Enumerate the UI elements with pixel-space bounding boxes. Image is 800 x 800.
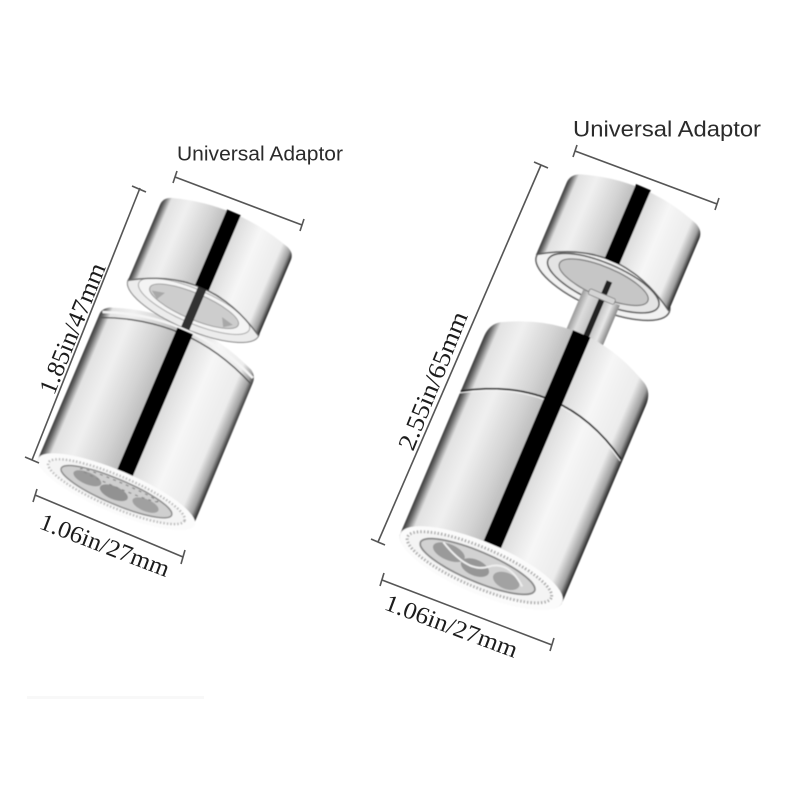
upper adaptor cap: [119, 185, 299, 356]
dimension line: right base width: [380, 573, 554, 651]
stem: [565, 290, 620, 348]
label: left height: 1.85in/47mm: [35, 259, 112, 398]
lower body rim over underside: [102, 297, 260, 378]
label: right base width: 1.06in/27mm: [381, 590, 521, 664]
dimension line: left height: [25, 186, 146, 463]
faucet aerator: extended right: [390, 153, 724, 626]
label: left base width: 1.06in/27mm: [36, 509, 173, 583]
faucet aerator: compact left: [30, 180, 313, 544]
label: left universal adaptor: Universal Adaptor: [177, 144, 343, 166]
upper adaptor underside: [119, 260, 267, 356]
upper adaptor underside: [526, 233, 679, 336]
dimension line: right height: [371, 162, 548, 545]
dimension line: right adaptor width: [573, 145, 719, 210]
nozzle face: [390, 510, 572, 626]
faint shadow line: [27, 696, 204, 699]
dimension line: left base width: [33, 489, 185, 564]
dimension line: left adaptor width: [173, 171, 304, 231]
label: right height: 2.55in/65mm: [394, 307, 474, 454]
lower body: [30, 291, 265, 543]
nozzle face: [30, 439, 203, 544]
lower body with seam: [390, 299, 662, 625]
label: right universal adaptor: Universal Adaptor: [573, 116, 761, 142]
upper adaptor cap: [536, 159, 709, 311]
